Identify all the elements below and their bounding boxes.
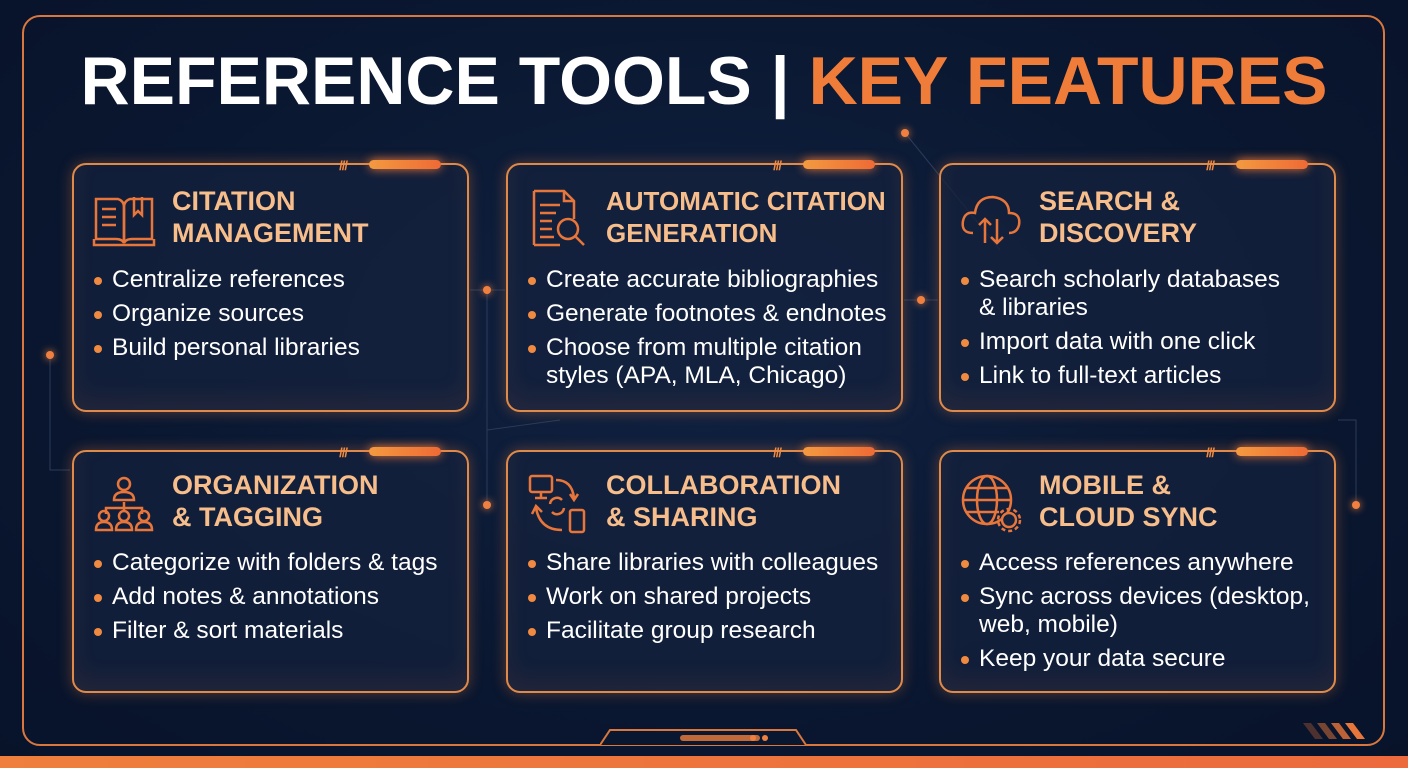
panel: automatic citation generation: ///	[773, 158, 781, 173]
bullet list: Access references anywhere	[979, 549, 1294, 576]
bullet list: Build personal libraries	[112, 334, 360, 361]
icon: globe with gear	[962, 474, 1022, 532]
heading	[1039, 186, 1197, 248]
heading	[172, 470, 378, 532]
bullet list: Search scholarly databases	[979, 266, 1280, 293]
icon: devices sync	[528, 474, 586, 534]
panel: citation management: ///	[339, 158, 347, 173]
bullet list: web, mobile)	[979, 611, 1118, 638]
heading: MANAGEMENT	[172, 218, 368, 248]
bullet list	[961, 266, 1280, 389]
bullet list: Choose from multiple citation	[546, 334, 862, 361]
panel: collaboration & sharing	[506, 450, 903, 693]
heading: & TAGGING	[172, 502, 323, 532]
heading: GENERATION	[606, 218, 777, 248]
bullet list: styles (APA, MLA, Chicago)	[546, 362, 846, 389]
bullet list: Filter & sort materials	[112, 617, 343, 644]
panel: mobile & cloud sync: ///	[1206, 445, 1214, 460]
heading: MOBILE &	[1039, 470, 1171, 500]
panel: search & discovery: ///	[1206, 158, 1214, 173]
icon: cloud transfer	[961, 196, 1020, 245]
bullet list	[94, 549, 437, 644]
panel: organization & tagging: ///	[339, 445, 347, 460]
bullet list	[961, 549, 1310, 672]
icon: open book	[92, 197, 156, 246]
bullet list: Work on shared projects	[546, 583, 811, 610]
panel: mobile & cloud sync	[939, 450, 1336, 693]
heading: ORGANIZATION	[172, 470, 378, 500]
bullet list: Import data with one click	[979, 328, 1255, 355]
heading	[606, 470, 841, 532]
bullet list	[94, 266, 360, 361]
bullet list: Create accurate bibliographies	[546, 266, 878, 293]
bullet list: Keep your data secure	[979, 645, 1226, 672]
bullet list: Add notes & annotations	[112, 583, 379, 610]
bullet list: Sync across devices (desktop,	[979, 583, 1310, 610]
bottom notch decoration	[600, 729, 806, 745]
bullet list: Generate footnotes & endnotes	[546, 300, 887, 327]
bullet list: Facilitate group research	[546, 617, 816, 644]
icon: people hierarchy	[94, 476, 154, 532]
heading	[1039, 470, 1218, 532]
icon: document with magnifier	[532, 190, 585, 246]
bullet list: & libraries	[979, 294, 1088, 321]
heading: AUTOMATIC CITATION	[606, 186, 886, 216]
panel: automatic citation generation	[506, 163, 903, 412]
heading: & SHARING	[606, 502, 758, 532]
heading	[172, 186, 368, 248]
stripes decoration	[1303, 723, 1365, 739]
heading	[606, 186, 886, 248]
bullet list: Share libraries with colleagues	[546, 549, 878, 576]
heading: DISCOVERY	[1039, 218, 1197, 248]
panel: search & discovery	[939, 163, 1336, 412]
bullet list: Categorize with folders & tags	[112, 549, 437, 576]
title: REFERENCE TOOLS | KEY FEATURES	[80, 43, 1327, 119]
bullet list	[528, 549, 878, 644]
bullet list: Link to full-text articles	[979, 362, 1221, 389]
panel: citation management	[72, 163, 469, 412]
bottom bar	[0, 756, 1408, 768]
heading: CLOUD SYNC	[1039, 502, 1218, 532]
panel: organization & tagging	[72, 450, 469, 693]
heading: SEARCH &	[1039, 186, 1180, 216]
bullet list: Organize sources	[112, 300, 304, 327]
heading: CITATION	[172, 186, 295, 216]
bullet list	[528, 266, 887, 389]
panel: collaboration & sharing: ///	[773, 445, 781, 460]
heading: COLLABORATION	[606, 470, 841, 500]
bullet list: Centralize references	[112, 266, 345, 293]
